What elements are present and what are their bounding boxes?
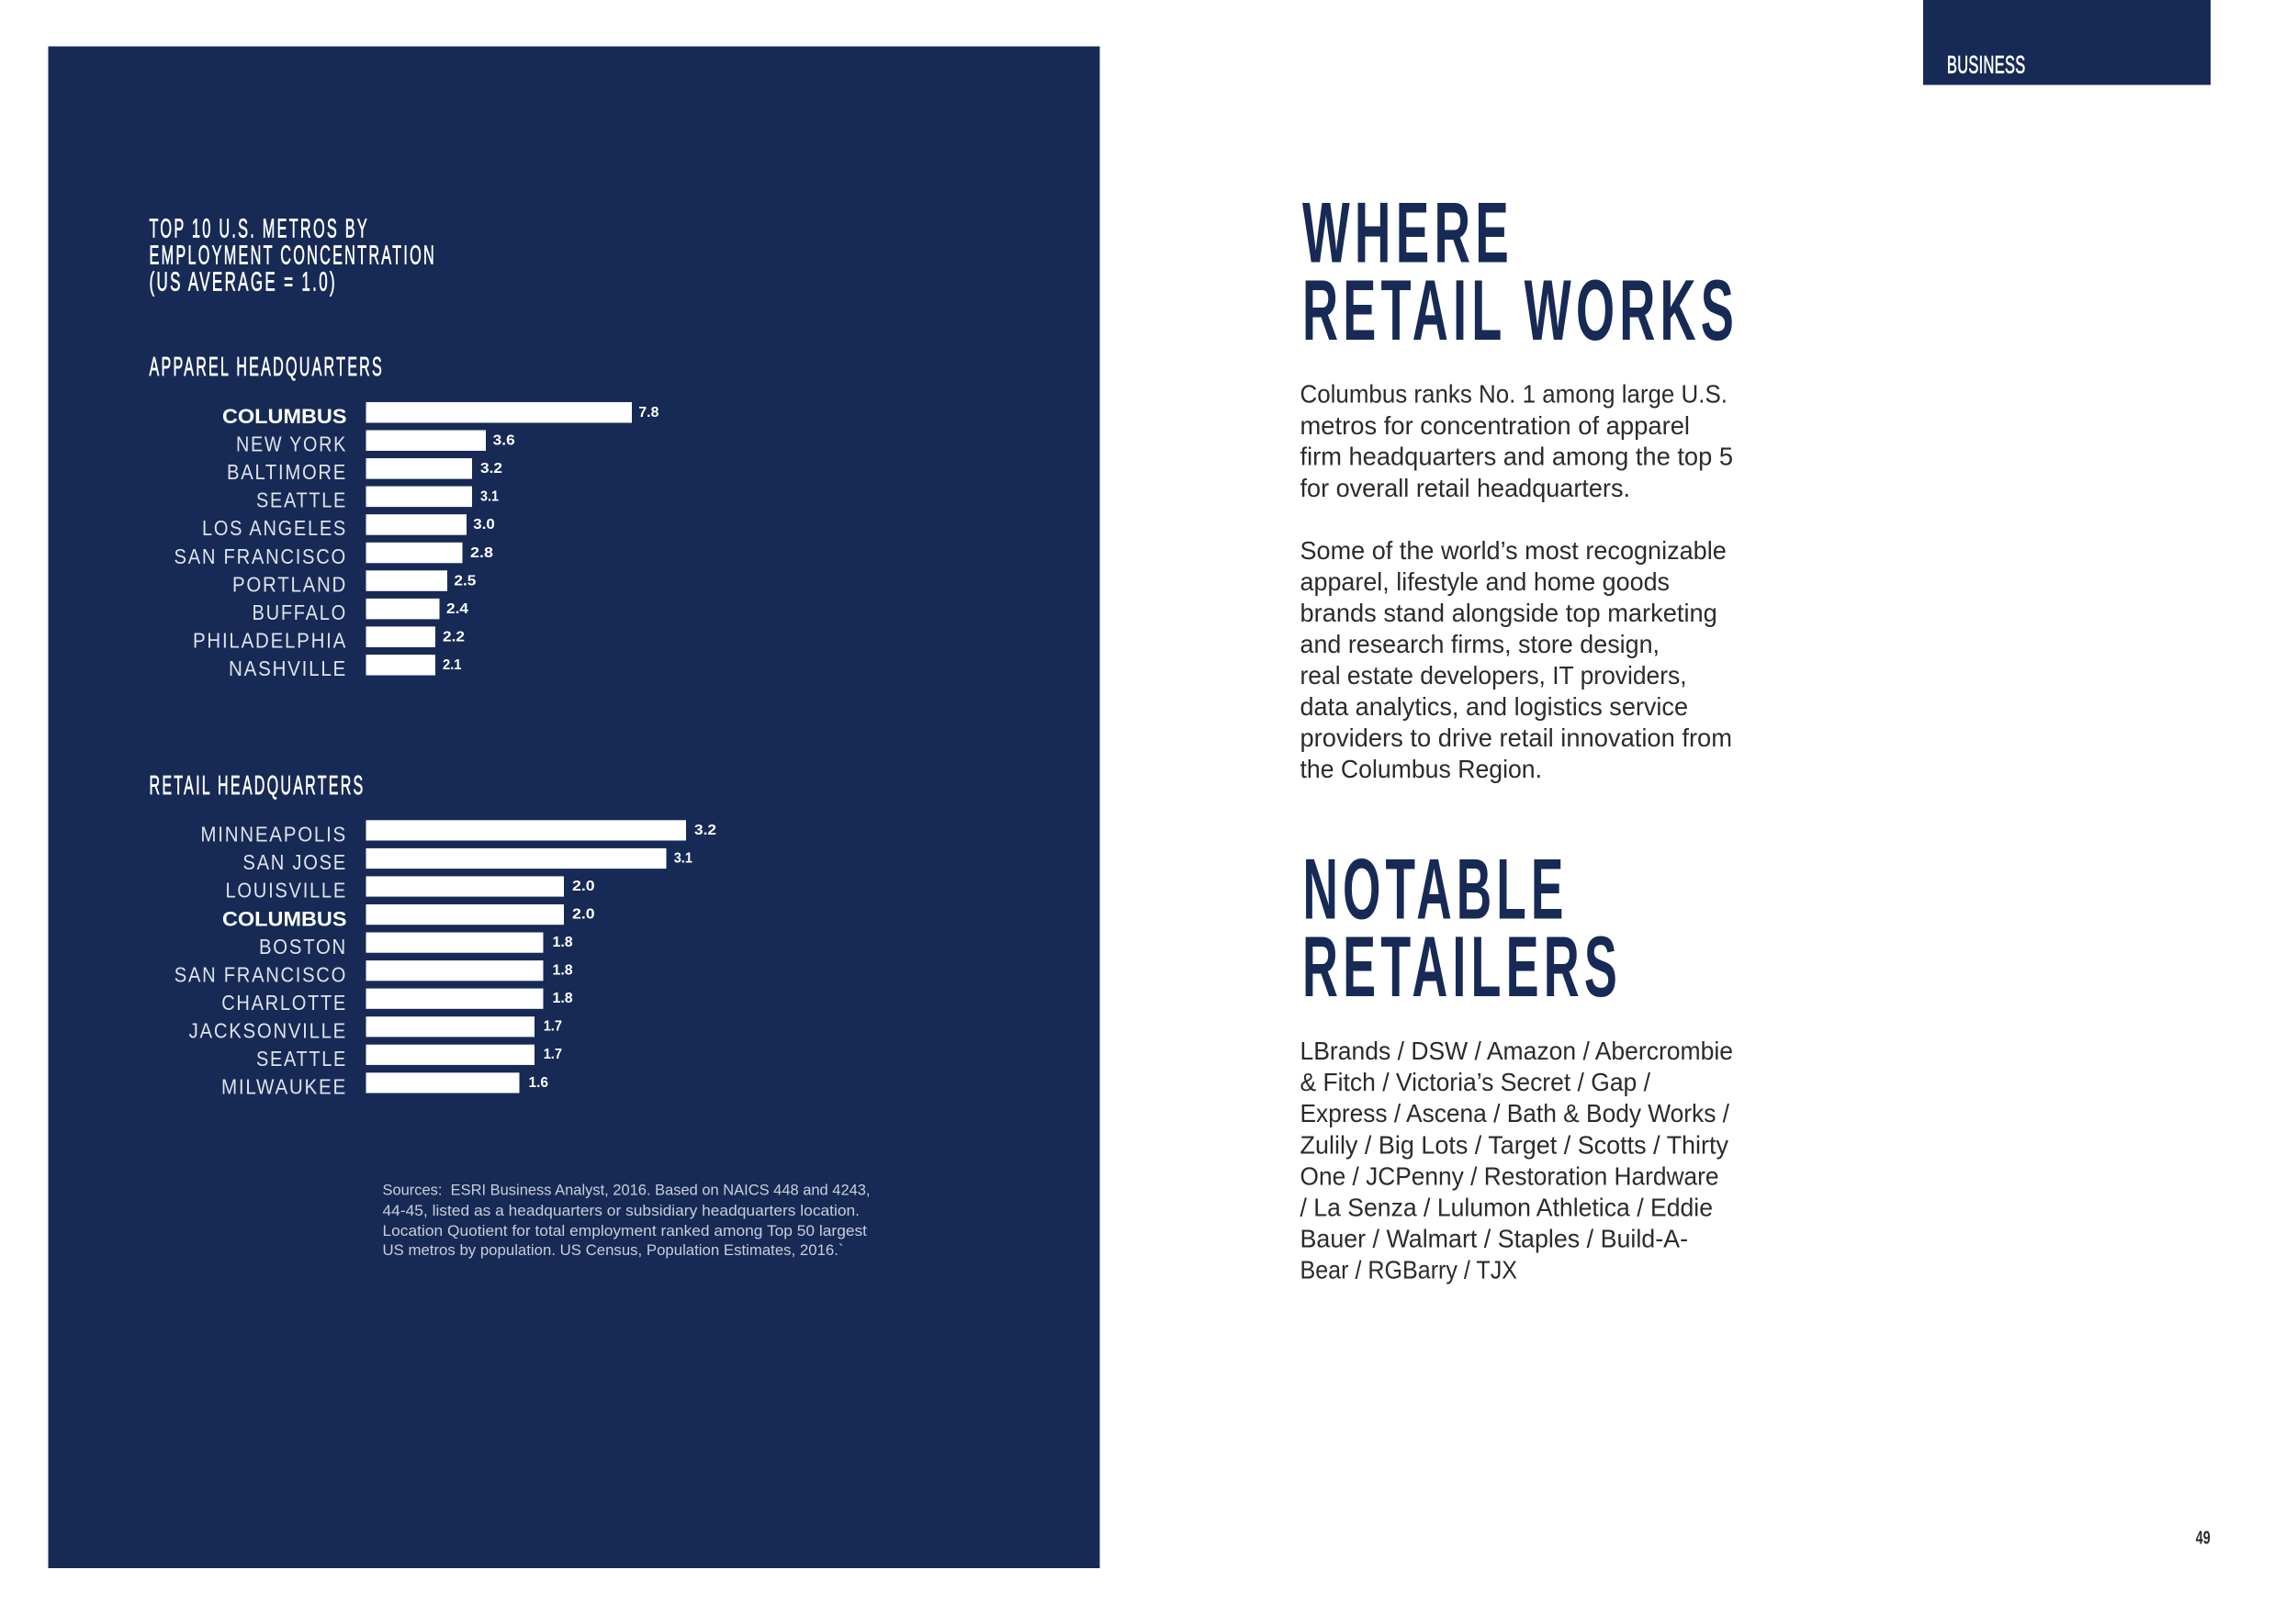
text block: retailers list: Express / Ascena / Bath & Body Works / — [1300, 1099, 1729, 1127]
bar chart: retail headquarters: MINNEAPOLIS — [200, 823, 347, 847]
bar chart: retail headquarters: 2.0 — [572, 879, 595, 894]
sources note: Sources: ESRI Business Analyst, 2016. Based on NAICS 448 and 4243, — [382, 1182, 871, 1199]
bar chart: apparel headquarters: 3.0 — [473, 517, 495, 533]
text block: columbus ranks: for overall retail headquarters. — [1300, 474, 1630, 502]
chart title: TOP 10 U.S. METROS BY — [149, 215, 369, 244]
bar chart: apparel headquarters — [174, 402, 659, 680]
bar chart: retail headquarters: 2.0 — [572, 907, 595, 922]
bar chart: retail headquarters: SEATTLE — [256, 1047, 347, 1071]
text block: retailers list: Bear / RGBarry / TJX — [1300, 1256, 1517, 1284]
bar chart: apparel headquarters: 3.2 — [480, 461, 502, 477]
text block: columbus ranks: Columbus ranks No. 1 among large U.S. — [1300, 380, 1728, 408]
panel: navy chart background — [48, 46, 1100, 1568]
bar chart: retail headquarters: SAN JOSE — [242, 850, 347, 874]
text block: recognizable brands — [1300, 536, 1732, 783]
bar chart: apparel headquarters: COLUMBUS — [222, 405, 347, 428]
heading: notable retailers — [1302, 841, 1622, 1015]
bar chart: apparel headquarters: 7.8 — [638, 405, 659, 421]
bar chart: apparel headquarters: 2.8 — [470, 545, 493, 561]
bar chart: retail headquarters: 1.8 — [553, 991, 573, 1006]
section tab: business — [1923, 0, 2211, 84]
bar chart: apparel headquarters: SEATTLE — [256, 488, 347, 512]
text block: retailers list — [1300, 1037, 1733, 1284]
text block: recognizable brands: apparel, lifestyle and home goods — [1300, 567, 1670, 596]
bar chart: apparel headquarters: SAN FRANCISCO — [174, 544, 347, 568]
bar chart: apparel headquarters: NEW YORK — [236, 432, 347, 455]
bar chart: retail headquarters: 1.8 — [553, 935, 573, 950]
heading: where retail works — [1302, 184, 1739, 358]
bar chart: retail headquarters — [174, 820, 716, 1099]
text block: recognizable brands: Some of the world’s most recognizable — [1300, 536, 1727, 565]
bar chart: retail headquarters: 1.7 — [544, 1019, 562, 1035]
bar chart: retail headquarters: 1.7 — [544, 1047, 562, 1062]
section tab: business: BUSINESS — [1947, 50, 2026, 78]
bar chart: retail headquarters: 1.6 — [529, 1075, 548, 1091]
bar chart: retail headquarters: MILWAUKEE — [221, 1075, 347, 1099]
text block: columbus ranks: metros for concentration of apparel — [1300, 411, 1690, 440]
text block: retailers list: / La Senza / Lulumon Athletica / Eddie — [1300, 1194, 1713, 1221]
chart title: (US AVERAGE = 1.0) — [149, 268, 337, 297]
text block: retailers list: & Fitch / Victoria’s Secret / Gap / — [1300, 1068, 1650, 1096]
bar chart: apparel headquarters: 2.4 — [446, 601, 468, 617]
heading: retail headquarters: RETAIL HEADQUARTERS — [149, 771, 366, 801]
page number: 49 — [2196, 1529, 2211, 1549]
sources note: US metros by population. US Census, Population Estimates, 2016.` — [382, 1241, 843, 1259]
text block: recognizable brands: and research firms, store design, — [1300, 630, 1660, 658]
bar chart: retail headquarters: SAN FRANCISCO — [174, 962, 347, 986]
text block: recognizable brands: brands stand alongside top marketing — [1300, 599, 1717, 627]
bar chart: retail headquarters: COLUMBUS — [222, 907, 347, 930]
bar chart: retail headquarters: LOUISVILLE — [226, 879, 347, 903]
bar chart: apparel headquarters: NASHVILLE — [229, 656, 347, 680]
sources note — [382, 1182, 871, 1259]
sources note: Location Quotient for total employment ranked among Top 50 largest — [382, 1222, 867, 1239]
bar chart: apparel headquarters: 2.2 — [443, 629, 465, 645]
bar chart: apparel headquarters: 3.1 — [480, 489, 499, 505]
text block: columbus ranks — [1300, 380, 1733, 502]
bar chart: retail headquarters: JACKSONVILLE — [189, 1019, 347, 1043]
text block: retailers list: One / JCPenny / Restoration Hardware — [1300, 1161, 1719, 1190]
text block: retailers list: Bauer / Walmart / Staples / Build-A- — [1300, 1224, 1688, 1252]
bar chart: apparel headquarters: PHILADELPHIA — [193, 628, 347, 652]
bar chart: retail headquarters: BOSTON — [259, 935, 347, 959]
heading: notable retailers: NOTABLE — [1302, 841, 1569, 937]
bar chart: apparel headquarters: 2.1 — [443, 657, 462, 673]
bar chart: retail headquarters: CHARLOTTE — [221, 991, 347, 1015]
bar chart: retail headquarters: 3.2 — [694, 823, 716, 838]
bar chart: apparel headquarters: PORTLAND — [232, 572, 347, 596]
sources note: 44-45, listed as a headquarters or subsidiary headquarters location. — [382, 1202, 860, 1219]
bar chart: apparel headquarters: BALTIMORE — [227, 460, 347, 484]
heading: apparel headquarters: APPAREL HEADQUARTERS — [149, 353, 384, 382]
bar chart: apparel headquarters: BUFFALO — [252, 600, 347, 624]
text block: columbus ranks: firm headquarters and among the top 5 — [1300, 443, 1733, 471]
heading: where retail works: RETAIL WORKS — [1302, 262, 1739, 358]
text block: recognizable brands: providers to drive retail innovation from — [1300, 723, 1732, 752]
bar chart: apparel headquarters: 2.5 — [454, 573, 477, 589]
bar chart: retail headquarters: 1.8 — [553, 963, 573, 979]
chart title — [149, 215, 436, 297]
text block: recognizable brands: real estate developers, IT providers, — [1300, 661, 1687, 690]
text block: recognizable brands: the Columbus Region. — [1300, 755, 1542, 783]
chart title: EMPLOYMENT CONCENTRATION — [149, 241, 436, 270]
heading: where retail works: WHERE — [1302, 184, 1514, 280]
text block: retailers list: Zulily / Big Lots / Target / Scotts / Thirty — [1300, 1130, 1728, 1159]
bar chart: apparel headquarters: 3.6 — [493, 433, 515, 448]
text block: retailers list: LBrands / DSW / Amazon / Abercrombie — [1300, 1037, 1733, 1065]
heading: notable retailers: RETAILERS — [1302, 918, 1622, 1015]
text block: recognizable brands: data analytics, and logistics service — [1300, 692, 1688, 721]
bar chart: apparel headquarters: LOS ANGELES — [202, 516, 347, 540]
bar chart: retail headquarters: 3.1 — [674, 850, 692, 866]
